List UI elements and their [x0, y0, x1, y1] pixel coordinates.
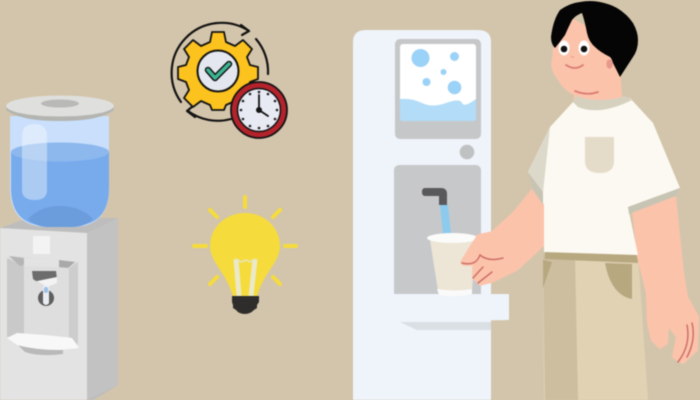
far arm and hand	[461, 190, 544, 285]
shelf	[395, 294, 509, 330]
t-shirt	[528, 96, 680, 255]
icon: light bulb	[194, 197, 296, 314]
display panel	[395, 39, 481, 139]
bottled water cooler	[0, 96, 118, 400]
cooler body	[0, 218, 118, 400]
bottle lid	[6, 96, 114, 121]
shirt pocket	[585, 137, 614, 173]
neck	[573, 70, 623, 108]
dispensing recess	[394, 165, 481, 294]
faucet	[422, 188, 447, 205]
bulb base	[232, 296, 259, 314]
cooler drip tray	[7, 333, 79, 355]
bulb rays	[194, 197, 296, 284]
mouth and chin	[566, 56, 598, 94]
eyes	[558, 40, 590, 56]
water dispenser	[353, 30, 509, 400]
indicator button	[460, 145, 474, 159]
bulb filament	[236, 259, 255, 296]
icon: gear with check and clock	[172, 23, 287, 138]
dispenser body	[353, 30, 491, 400]
paper cup	[427, 233, 478, 296]
bulb glass	[210, 213, 280, 296]
person	[461, 1, 698, 400]
water stream	[440, 205, 451, 234]
face	[551, 18, 620, 96]
hair	[551, 1, 638, 77]
circular arrows	[172, 23, 268, 121]
clock	[231, 82, 287, 138]
trousers	[543, 252, 648, 400]
near arm	[633, 197, 698, 363]
gear	[178, 32, 258, 110]
water bottle	[10, 116, 109, 227]
